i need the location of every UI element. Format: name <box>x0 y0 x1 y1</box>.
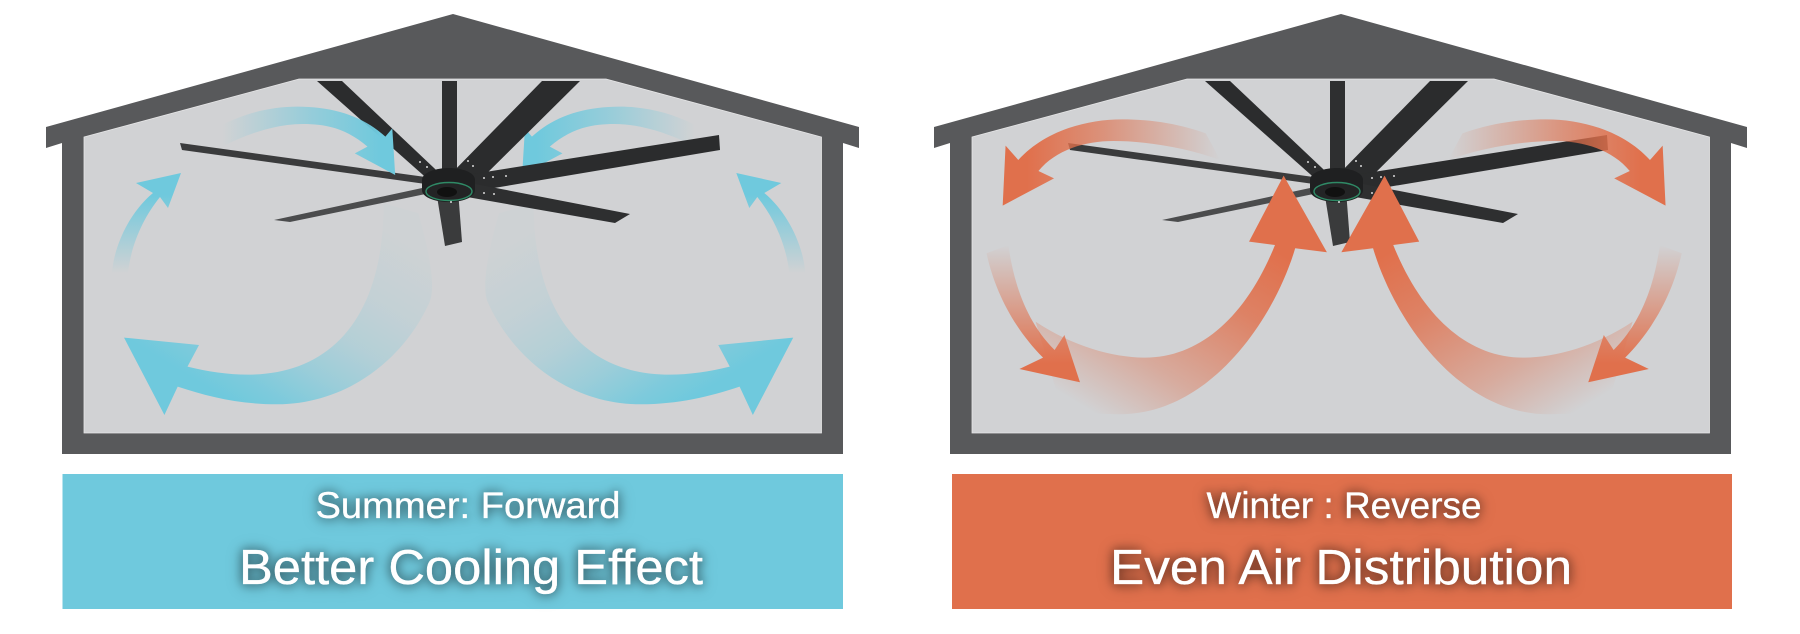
house outline: summer <box>46 14 859 454</box>
airflow arrow: winter top right <box>1448 119 1666 206</box>
house outline: winter <box>934 14 1747 454</box>
ceiling fan: summer <box>180 81 720 246</box>
airflow arrow: summer small left <box>112 173 181 273</box>
ceiling fan: winter <box>1068 81 1608 246</box>
caption bar: summer <box>62 474 843 609</box>
airflow arrow: winter top left <box>1003 119 1220 206</box>
caption text: Winter : Reverse: Winter : Reverse <box>1206 485 1482 526</box>
room interior: summer <box>84 79 822 433</box>
airflow arrow: winter big right <box>1341 176 1633 414</box>
airflow arrow: winter small left <box>987 245 1080 382</box>
airflow arrow: winter small right <box>1588 245 1682 382</box>
airflow arrow: summer top left <box>222 107 395 175</box>
airflow arrow: winter big left <box>1036 176 1327 414</box>
caption heading: Even Air Distribution: Even Air Distribution <box>1110 541 1572 595</box>
airflow arrow: summer big right <box>485 203 793 415</box>
airflow arrow: summer top right <box>522 107 695 175</box>
caption heading: Better Cooling Effect: Better Cooling Effect <box>239 541 703 595</box>
room interior: winter <box>972 79 1710 433</box>
caption bar: winter <box>952 474 1732 609</box>
airflow arrow: summer small right <box>736 173 805 273</box>
panel: winter reverse <box>934 14 1747 454</box>
caption text: Summer: Forward: Summer: Forward <box>316 485 620 526</box>
airflow arrow: summer big left <box>124 203 432 415</box>
panel: summer forward <box>46 14 859 454</box>
